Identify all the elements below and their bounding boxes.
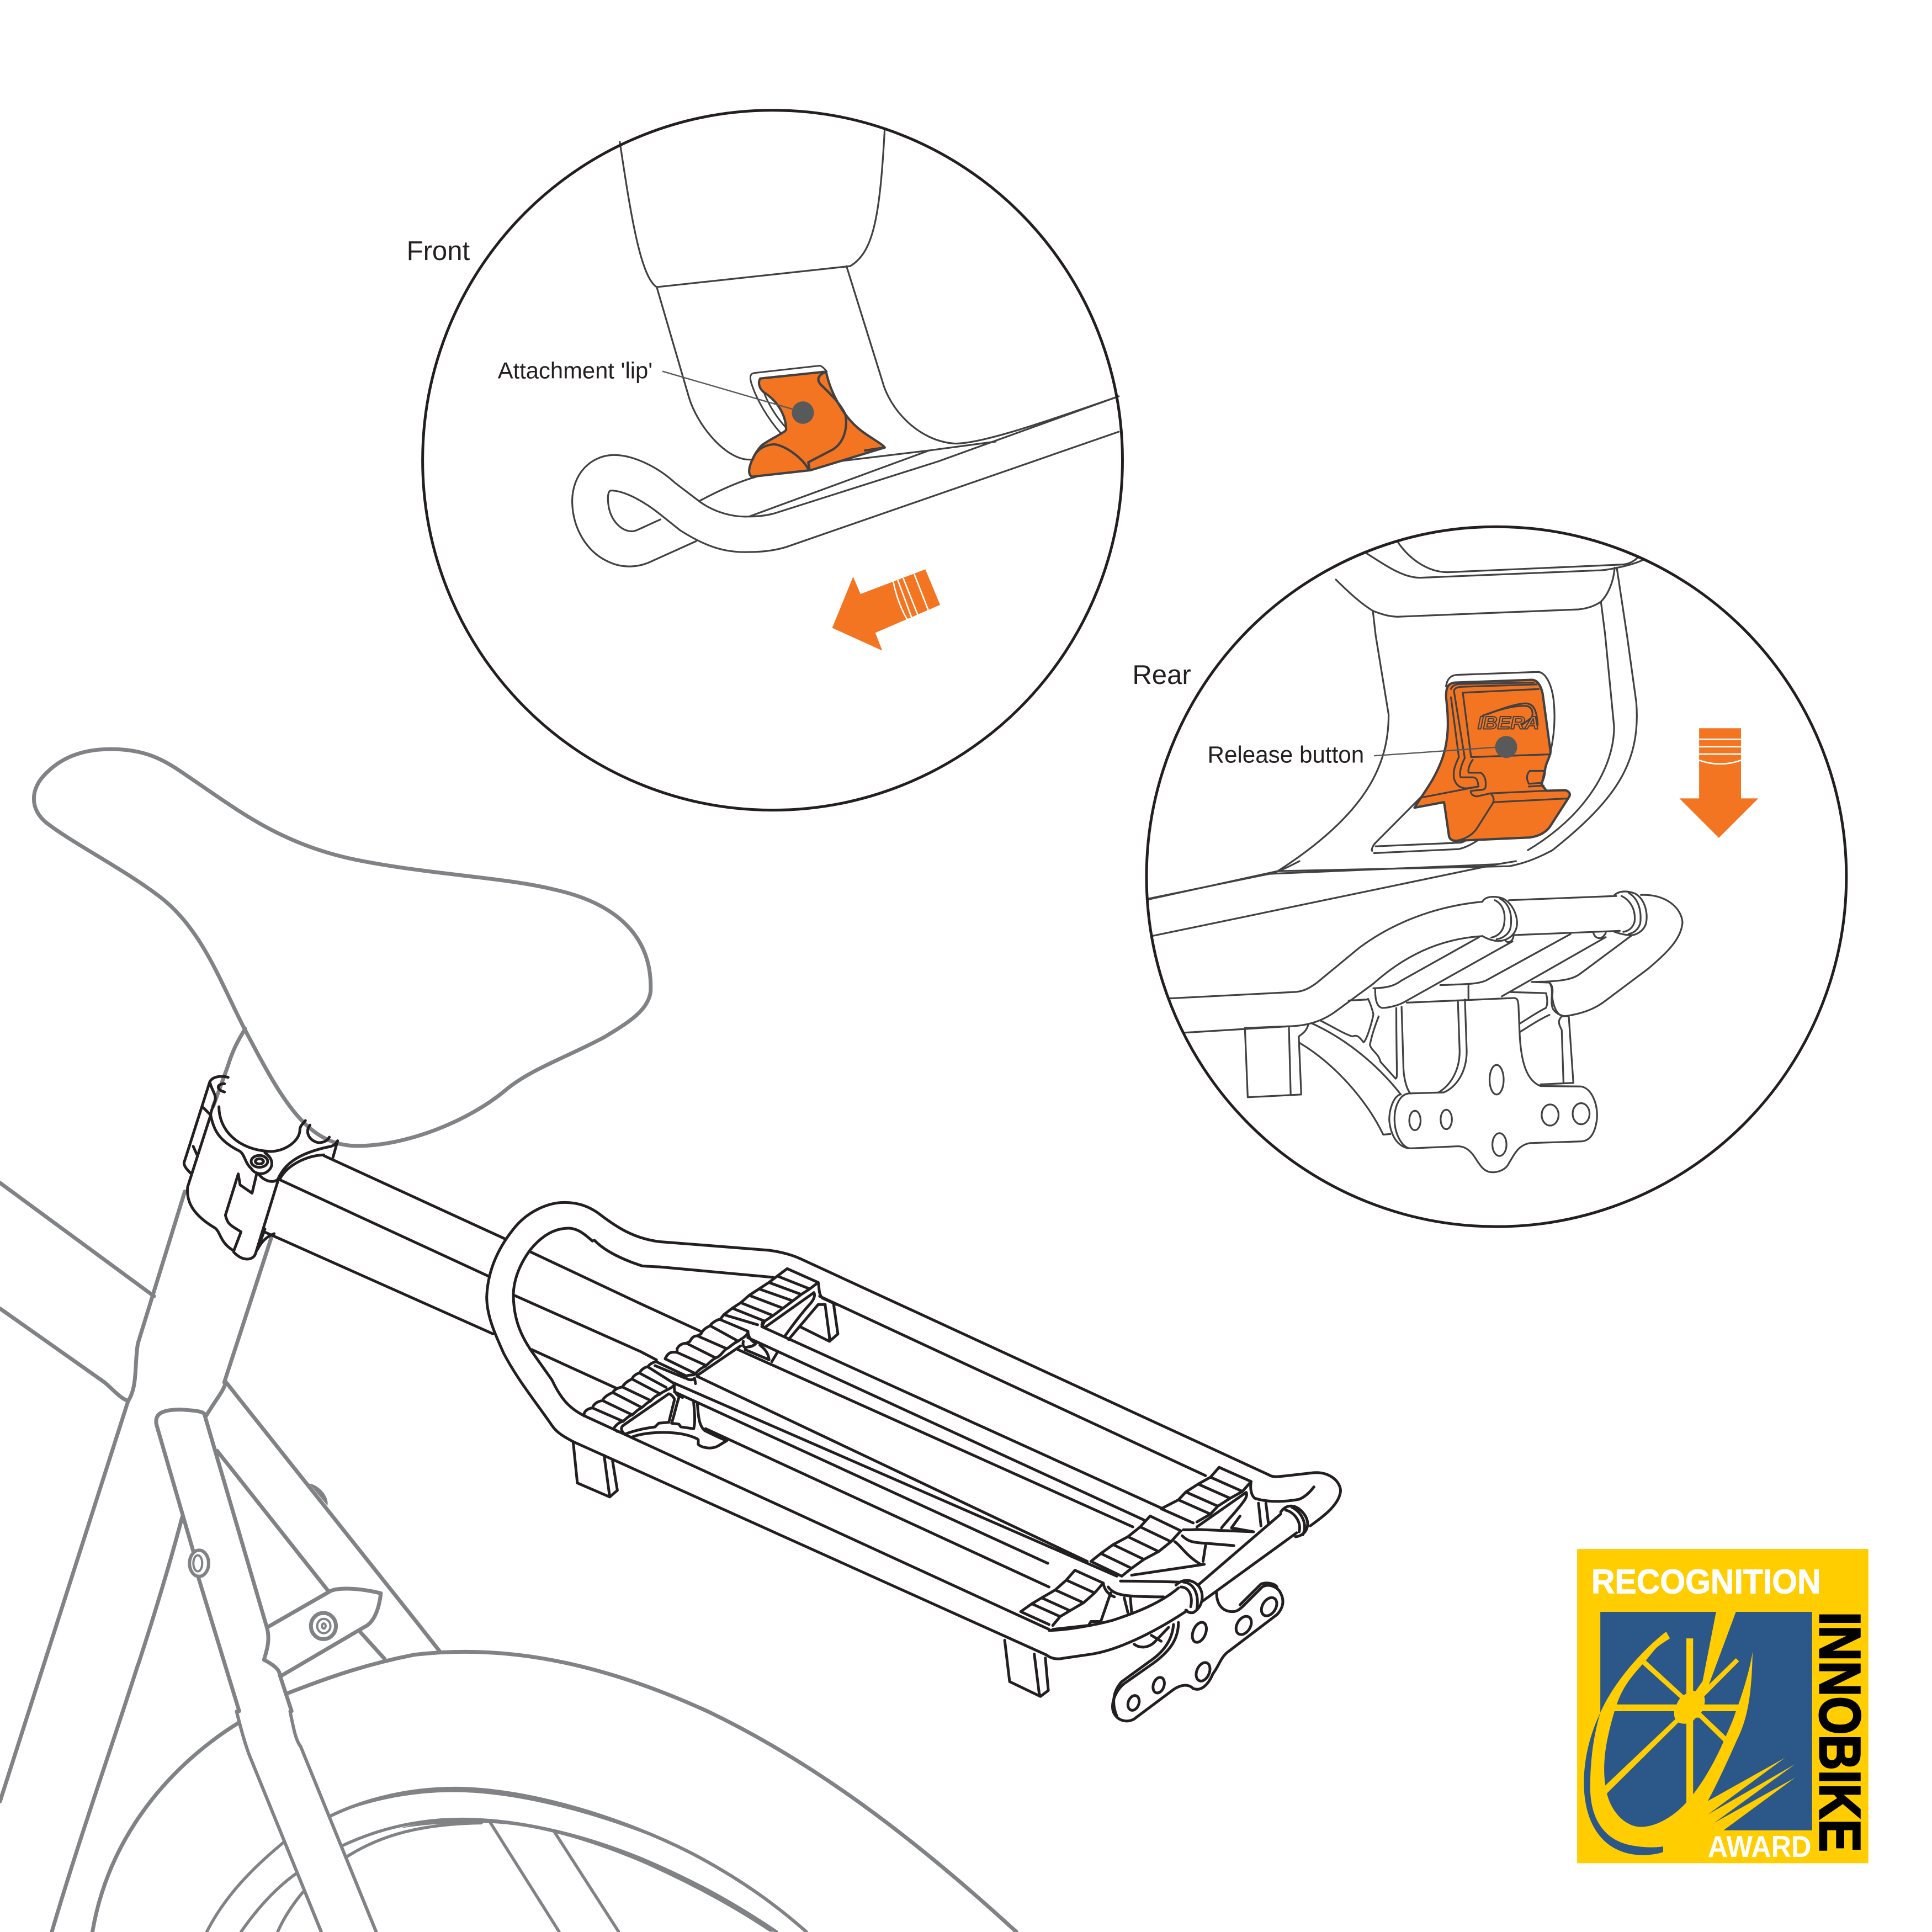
saddle underside outlines rear top bbox=[1336, 541, 1644, 635]
brace under upper pad bbox=[762, 1282, 836, 1340]
rear toothed pad: top bbox=[1161, 1467, 1251, 1523]
saddle underside outlines front bbox=[620, 129, 1118, 460]
seat post clamp bbox=[184, 1076, 338, 1259]
middle and lower toothed pads with braces bbox=[584, 1319, 777, 1448]
panel: rear detail circle bbox=[1132, 527, 1846, 1227]
label Attachment lip: Attachment 'lip' bbox=[498, 357, 652, 383]
rear cross tube and collars bbox=[1176, 1506, 1308, 1613]
rack attached to seat post bbox=[184, 1076, 1341, 1721]
label Front: Front bbox=[407, 236, 470, 266]
rear plate bbox=[1349, 998, 1597, 1172]
rack legs: front pair bbox=[573, 1304, 838, 1497]
frame bolts bbox=[189, 1550, 336, 1639]
panel: front detail circle bbox=[407, 110, 1122, 810]
lower seat stay continuation bbox=[52, 1665, 138, 1932]
toothed pad: lower bbox=[584, 1362, 675, 1431]
frame bump bbox=[309, 1483, 328, 1506]
label Rear: Rear bbox=[1132, 660, 1191, 690]
front end of rack bbox=[573, 1214, 838, 1497]
seat stays lower, tyre and spokes bbox=[207, 1711, 806, 1932]
lower pad brace bbox=[622, 1384, 727, 1448]
leader line front bbox=[662, 371, 792, 409]
rear plate holes bbox=[1409, 1065, 1590, 1156]
saddle underside outlines rear lower bbox=[1148, 635, 1637, 899]
toothed pad: middle bbox=[655, 1319, 748, 1384]
leader line rear bbox=[1374, 747, 1495, 756]
seat post and seat tube bbox=[0, 1029, 271, 1801]
saddle bbox=[34, 749, 651, 1146]
rack legs: rear pair bbox=[1005, 1627, 1169, 1696]
release button orange part bbox=[1372, 672, 1570, 853]
plate holes bbox=[1126, 1596, 1280, 1711]
rear toothed pad: bottom bbox=[1021, 1570, 1103, 1626]
rear collars bbox=[1483, 891, 1647, 941]
mounting plate bbox=[1113, 1583, 1283, 1721]
rear loop and bars bbox=[1373, 895, 1682, 1016]
badge text INNOBIKE: INNOBIKE bbox=[1807, 1612, 1872, 1852]
rack hoop and beam inside hoop bbox=[487, 1202, 700, 1388]
badge text AWARD: AWARD bbox=[1708, 1829, 1811, 1864]
long rack rails bbox=[573, 1259, 1268, 1655]
attachment lip orange part bbox=[749, 365, 885, 477]
bicycle frame and saddle in grey bbox=[0, 749, 1017, 1932]
badge blue wheel cells bbox=[1584, 1612, 1812, 1855]
hoop lower legs bbox=[503, 1349, 585, 1442]
IBERA logo: IBERA bbox=[1478, 713, 1539, 733]
circle outline rear bbox=[1147, 527, 1846, 1227]
seat stay, chain stay and bracket bbox=[138, 1382, 440, 1711]
rack beam outside hoop bbox=[265, 1156, 505, 1334]
rear braces bbox=[1053, 1493, 1268, 1630]
toothed pad: upper bbox=[721, 1268, 818, 1326]
arrow: front orange bbox=[832, 569, 940, 651]
front rail tube bbox=[572, 396, 1119, 566]
badge text RECOGNITION: RECOGNITION bbox=[1591, 1563, 1821, 1601]
Innobike award badge bbox=[1577, 1549, 1872, 1864]
IBERA logo bbox=[1478, 703, 1539, 733]
rear toothed pad: middle bbox=[1091, 1516, 1181, 1576]
top tube bbox=[0, 1183, 154, 1401]
middle pad brace bbox=[697, 1331, 777, 1376]
rear legs and struts bbox=[1245, 983, 1573, 1134]
label Release button: Release button bbox=[1207, 742, 1364, 768]
rear end of rack with cross tube and plate bbox=[1005, 1467, 1341, 1721]
badge yellow background bbox=[1577, 1549, 1869, 1863]
rear tubes and bracket bbox=[1148, 861, 1682, 1172]
arrow: rear orange bbox=[1679, 728, 1758, 838]
fender bbox=[92, 1652, 1017, 1932]
circle outline front bbox=[423, 110, 1122, 810]
